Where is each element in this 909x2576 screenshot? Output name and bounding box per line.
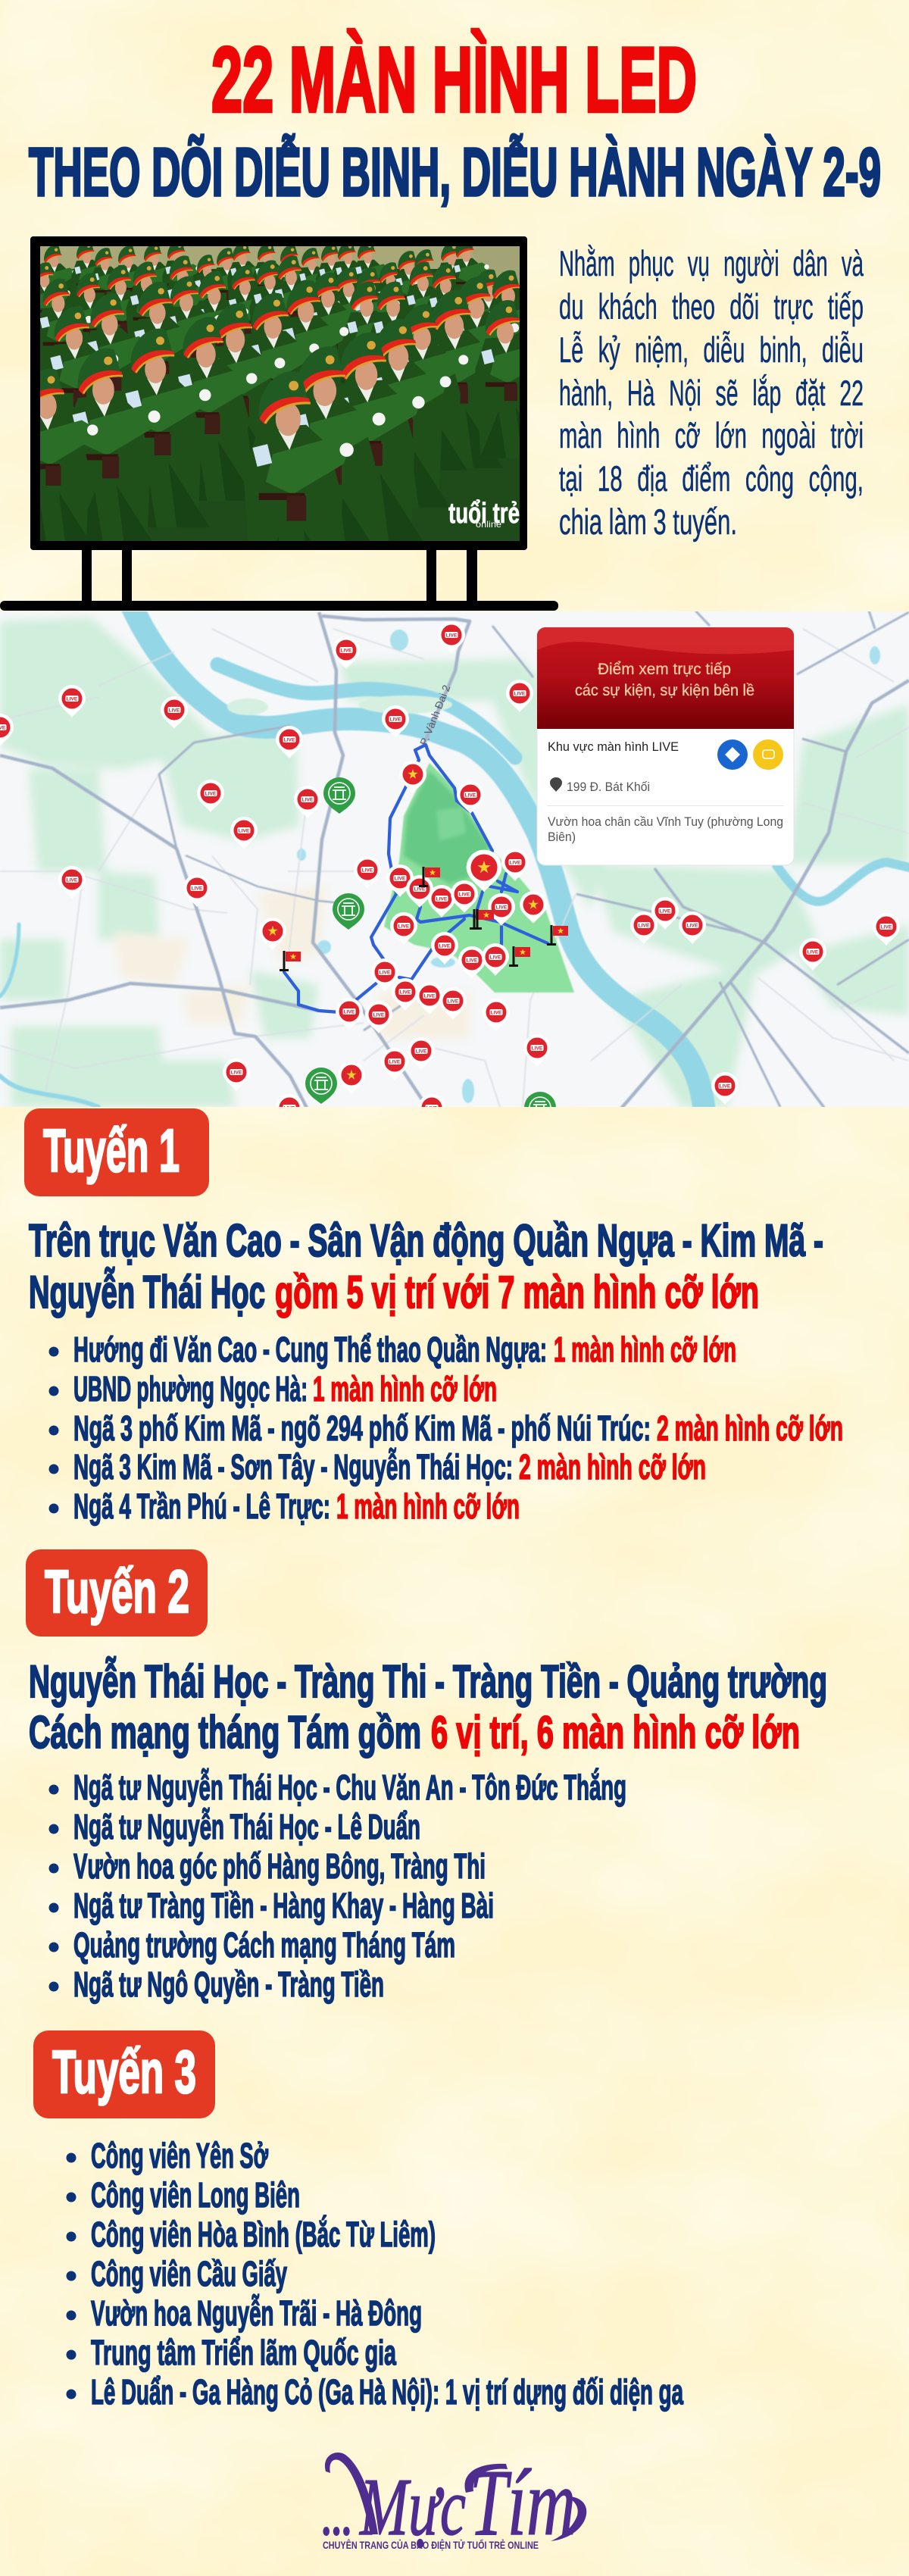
section: Tuyến 2 bbox=[26, 1549, 827, 2004]
card header title: Điểm xem trực tiếp bbox=[598, 661, 731, 678]
logo: Mực Tím: Tím bbox=[470, 2451, 576, 2556]
star event pins bbox=[259, 761, 547, 1094]
card place name: Khu vực màn hình LIVE bbox=[548, 740, 679, 754]
Tuyến 2 list: Quảng trường Cách mạng Tháng Tám bbox=[73, 1925, 455, 1965]
Tuyến 3 list: Trung tâm Triển lãm Quốc gia bbox=[91, 2333, 396, 2372]
map urban patches bbox=[114, 886, 470, 1038]
Tuyến 1 list: 1 màn hình cỡ lớn bbox=[336, 1487, 520, 1526]
Tuyến 3 list: Vườn hoa Nguyễn Trãi - Hà Đông bbox=[91, 2293, 422, 2333]
address row: 199 Đ. Bát Khối bbox=[567, 780, 650, 794]
Tuyến 3 list: Công viên Long Biên bbox=[91, 2175, 300, 2215]
map rivers bbox=[0, 606, 909, 1114]
title bbox=[29, 28, 881, 211]
road label: Vành Đai 2: P. Vành Đai 2 bbox=[417, 683, 453, 747]
map river islands bbox=[227, 696, 452, 715]
blue parade routes bbox=[284, 745, 548, 1012]
logo tagline: CHUYÊN TRANG CỦA BÁO ĐIỆN TỬ TUỔI TRẺ ONLINE bbox=[323, 2538, 539, 2551]
Hanoi green pins bbox=[305, 777, 556, 1128]
Tuyến 2 list: Ngã tư Tràng Tiền - Hàng Khay - Hàng Bài bbox=[73, 1886, 494, 1925]
Tuyến 3 list: Công viên Yên Sở bbox=[91, 2136, 268, 2175]
Tuyến 3 list: Công viên Hòa Bình (Bắc Từ Liêm) bbox=[91, 2215, 436, 2254]
directions button bbox=[717, 739, 748, 770]
Tuyến 2 list bbox=[48, 1768, 626, 2004]
logo: Mực Tím: Mực bbox=[359, 2462, 466, 2553]
photo: marching soldiers bbox=[40, 246, 520, 541]
card header title bbox=[575, 661, 754, 699]
Tuyến 1 list: 1 màn hình cỡ lớn bbox=[313, 1369, 497, 1408]
card description: Vườn hoa chân cầu Vĩnh Tuy (phường Long bbox=[548, 815, 783, 829]
Tuyến 1 list: Ngã 4 Trần Phú - Lê Trực: bbox=[73, 1487, 330, 1526]
LED screen billboard with photo bbox=[0, 236, 558, 611]
logo: Mực Tím: ... bbox=[323, 2486, 353, 2548]
intro paragraph bbox=[559, 243, 864, 542]
Tuyến 1 heading bbox=[29, 1215, 823, 1318]
Tuyến 1 heading: Nguyễn Thái Học bbox=[29, 1267, 265, 1318]
intro paragraph: chia làm 3 tuyến. bbox=[559, 502, 737, 542]
logo: Mực Tím bbox=[323, 2451, 586, 2556]
map lakes bbox=[297, 630, 880, 1103]
Tuyến 3 badge: Tuyến 3 bbox=[52, 2038, 196, 2106]
map panel bbox=[0, 606, 909, 1128]
section: Tuyến 3 bbox=[33, 2030, 683, 2412]
Tuyến 1 list: Hướng đi Văn Cao - Cung Thể thao Quần Ngựa: bbox=[73, 1330, 547, 1369]
Tuyến 1 list: UBND phường Ngọc Hà: bbox=[73, 1369, 308, 1408]
comment button bbox=[753, 739, 783, 770]
screen frame bbox=[30, 236, 527, 550]
card description: Biên) bbox=[548, 830, 576, 844]
photo watermark: tuổi trẻ bbox=[448, 498, 520, 530]
map info card bbox=[537, 627, 794, 865]
LIVE screen location pins bbox=[0, 621, 900, 1127]
photo watermark: online bbox=[476, 519, 501, 530]
Tuyến 2 badge bbox=[26, 1549, 208, 1637]
Tuyến 2 badge: Tuyến 2 bbox=[45, 1558, 189, 1625]
flag markers bbox=[280, 867, 568, 971]
Tuyến 1 list: 1 màn hình cỡ lớn bbox=[554, 1330, 736, 1369]
section: Tuyến 1 bbox=[24, 1108, 843, 1526]
map minor roads bbox=[0, 629, 909, 1107]
map base land bbox=[0, 611, 909, 1107]
card header title: các sự kiện, sự kiện bên lề bbox=[575, 682, 754, 699]
Tuyến 1 list: Ngã 3 Kim Mã - Sơn Tây - Nguyễn Thái Học: bbox=[73, 1447, 513, 1487]
Tuyến 2 heading: Cách mạng tháng Tám gồm bbox=[29, 1707, 421, 1758]
screen legs bbox=[0, 550, 558, 611]
Tuyến 2 heading bbox=[29, 1656, 827, 1758]
Tuyến 1 list: 2 màn hình cỡ lớn bbox=[519, 1447, 706, 1487]
Tuyến 1 badge: Tuyến 1 bbox=[43, 1117, 180, 1184]
central highlighted district bbox=[384, 763, 574, 993]
Tuyến 3 list bbox=[67, 2136, 683, 2412]
map highways bbox=[0, 611, 909, 1114]
Tuyến 2 list: Ngã tư Ngô Quyền - Tràng Tiền bbox=[73, 1965, 384, 2004]
Tuyến 1 badge bbox=[24, 1108, 209, 1196]
Tuyến 1 list bbox=[48, 1330, 843, 1526]
Tuyến 2 list: Vườn hoa góc phố Hàng Bông, Tràng Thi bbox=[73, 1846, 486, 1886]
card description bbox=[548, 815, 783, 844]
Tuyến 2 list: Ngã tư Nguyễn Thái Học - Lê Duẩn bbox=[73, 1807, 420, 1846]
address row bbox=[550, 777, 650, 794]
Tuyến 3 list: Công viên Cầu Giấy bbox=[91, 2254, 287, 2293]
card red header bbox=[537, 627, 794, 729]
photo watermark bbox=[448, 499, 520, 527]
Tuyến 3 badge bbox=[33, 2030, 215, 2118]
map green areas bbox=[0, 617, 909, 1107]
